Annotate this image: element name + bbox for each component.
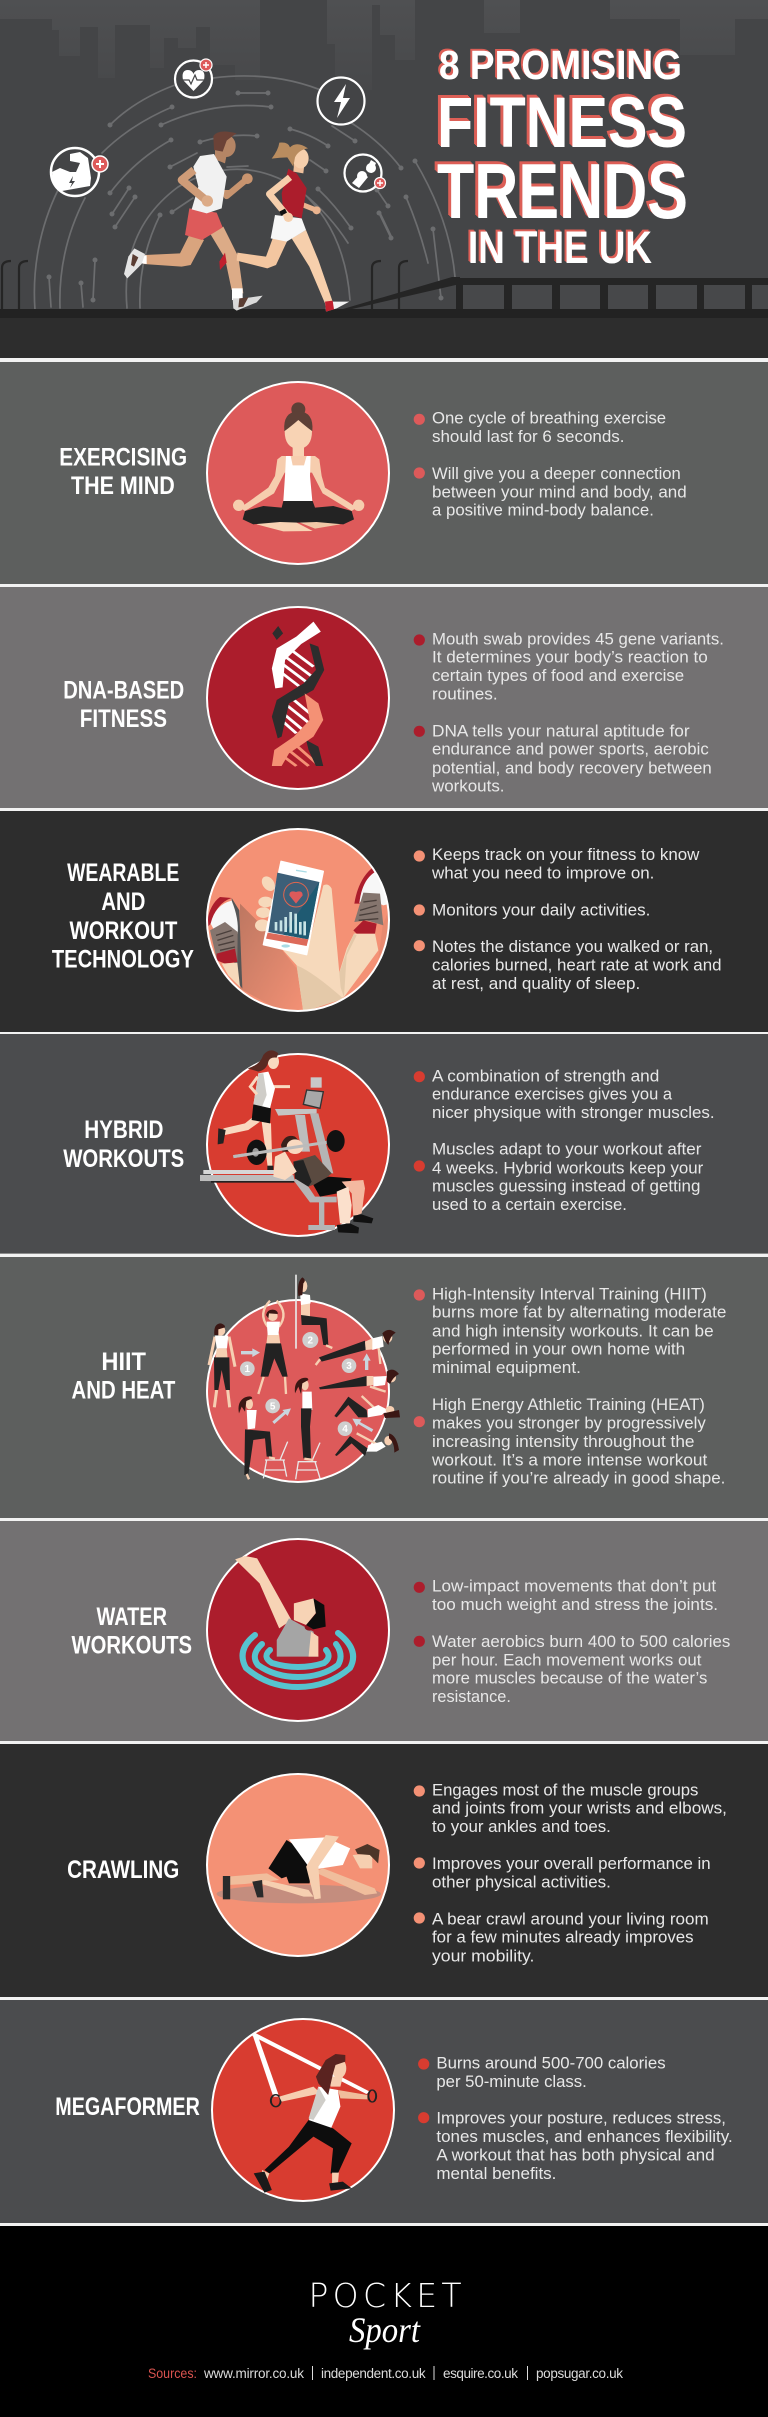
heading: HYBRID	[84, 1116, 164, 1144]
bullet list: too much weight and stress the joints.	[432, 1596, 718, 1614]
figure: arms raised	[258, 1301, 288, 1394]
icon: bone joint	[344, 154, 386, 192]
motion arcs	[34, 76, 455, 310]
runner: man	[124, 132, 263, 311]
step numbers: 2	[308, 1335, 314, 1346]
bullet list: A combination of strength and	[432, 1067, 659, 1085]
figure: sit-up top	[334, 1396, 400, 1418]
bullet list: endurance and power sports, aerobic	[432, 741, 709, 759]
bullet list: Muscles adapt to your workout after	[432, 1141, 702, 1159]
arrows	[241, 1348, 373, 1432]
step numbers: 4	[342, 1424, 348, 1435]
heading	[59, 444, 187, 500]
icon: lightning bolt	[318, 78, 364, 124]
bullet list: other physical activities.	[432, 1873, 611, 1891]
title: 8 PROMISING	[439, 42, 682, 88]
bullet list	[414, 1781, 727, 1965]
icon: flexed bicep	[51, 148, 108, 196]
ground	[0, 309, 768, 358]
bullet list: routines.	[432, 686, 498, 704]
bullet list: for a few minutes already improves	[432, 1929, 694, 1947]
header panel	[0, 0, 768, 358]
bullet list: tones muscles, and enhances flexibility.	[436, 2128, 733, 2146]
bullet list: workouts.	[431, 778, 504, 796]
chairs	[263, 1442, 320, 1479]
sources: esquire.co.uk	[443, 2366, 518, 2381]
bullet list: Engages most of the muscle groups	[432, 1781, 698, 1799]
bullet list: per hour. Each movement works out	[432, 1651, 702, 1669]
panel: hiit and heat	[0, 1257, 768, 1518]
logo: pocket sport: POCKET	[308, 2276, 462, 2315]
illustration: meditation	[207, 382, 389, 564]
bullet list	[414, 630, 724, 796]
illustration: suspension straps	[212, 2019, 394, 2201]
step numbers: 3	[346, 1361, 352, 1372]
figure: standing	[209, 1323, 235, 1407]
bullet list: A workout that has both physical and	[436, 2147, 715, 2165]
heading: AND HEAT	[72, 1377, 176, 1405]
bullet list: Notes the distance you walked or ran,	[432, 938, 713, 956]
heading: THE MIND	[71, 472, 175, 500]
bullet list: Mouth swab provides 45 gene variants.	[432, 630, 724, 648]
bullet list: endurance exercises gives you a	[432, 1086, 672, 1104]
bullet list: High Energy Athletic Training (HEAT)	[432, 1396, 705, 1414]
sources	[148, 2366, 623, 2381]
bullet list: Improves your posture, reduces stress,	[436, 2110, 726, 2128]
bullet list: muscles guessing instead of getting	[432, 1178, 700, 1196]
bullet list: burns more fat by alternating moderate	[432, 1304, 726, 1322]
icon badge: plus	[92, 156, 108, 172]
bullet list	[414, 846, 722, 993]
panel: crawling	[0, 1744, 768, 1997]
title	[437, 42, 688, 273]
city skyline	[0, 0, 768, 320]
bullet list	[414, 1067, 715, 1214]
heading: HIIT	[101, 1348, 147, 1376]
sources: Sources:	[148, 2366, 197, 2381]
heading: DNA-BASED	[63, 677, 184, 705]
bullet list: Improves your overall performance in	[432, 1855, 711, 1873]
icon badge: plus	[200, 59, 212, 71]
bridge	[343, 277, 768, 309]
heading	[63, 1116, 184, 1173]
sources: independent.co.uk	[321, 2366, 426, 2381]
panel: hybrid workouts	[0, 1034, 768, 1253]
illustration: dna helix	[207, 607, 389, 789]
street lamps	[2, 261, 408, 309]
step numbers: 1	[245, 1364, 251, 1375]
bullet list: your mobility.	[432, 1947, 534, 1965]
bullet list: makes you stronger by progressively	[432, 1414, 707, 1432]
bullet list	[414, 1578, 730, 1706]
logo: pocket sport: Sport	[349, 2310, 421, 2350]
panel: exercising the mind	[0, 362, 768, 584]
figure: step-up	[238, 1396, 275, 1479]
icon: heart rate	[175, 59, 212, 98]
bullet list: used to a certain exercise.	[432, 1196, 627, 1214]
heading	[72, 1603, 192, 1660]
panel: dna-based fitness	[0, 587, 768, 808]
bullet list: performed in your own home with	[432, 1341, 685, 1359]
heading: TECHNOLOGY	[52, 946, 194, 974]
title: TRENDS	[437, 147, 688, 235]
bullet list: and joints from your wrists and elbows,	[432, 1800, 727, 1818]
bullet list	[418, 2054, 733, 2183]
bullet list: and high intensity workouts. It can be	[432, 1322, 714, 1340]
sources: www.mirror.co.uk	[203, 2366, 304, 2381]
title: FITNESS	[437, 84, 687, 163]
runner: woman	[219, 143, 349, 312]
heading: WEARABLE	[67, 859, 179, 887]
illustration: water aerobics	[207, 1539, 389, 1721]
illustration: treadmill and bench press	[200, 1050, 389, 1236]
bullet list: should last for 6 seconds.	[432, 428, 624, 446]
bullet list: what you need to improve on.	[431, 864, 654, 882]
heading: CRAWLING	[67, 1856, 179, 1884]
bullet list: a positive mind-body balance.	[432, 502, 654, 520]
heading: EXERCISING	[59, 444, 187, 472]
logo: pocket sport	[308, 2276, 462, 2350]
bullet list: One cycle of breathing exercise	[432, 410, 666, 428]
title: IN THE UK	[468, 222, 652, 273]
bullet list: potential, and body recovery between	[432, 759, 712, 777]
figure: plank low	[319, 1370, 399, 1392]
figure: step-up standing	[295, 1378, 313, 1460]
heading: FITNESS	[80, 705, 167, 733]
heading	[72, 1348, 176, 1405]
bullet list: minimal equipment.	[432, 1359, 581, 1377]
panel: water workouts	[0, 1521, 768, 1741]
bullet list: workout. It’s a more intense workout	[431, 1451, 708, 1469]
bullet list: DNA tells your natural aptitude for	[432, 722, 690, 740]
panel: megaformer	[0, 2000, 768, 2223]
figure: plank high	[316, 1330, 396, 1365]
bullet list	[414, 410, 687, 520]
bullet list: Keeps track on your fitness to know	[432, 846, 700, 864]
bullet list: Burns around 500-700 calories	[436, 2054, 666, 2072]
sources: popsugar.co.uk	[536, 2366, 623, 2381]
bullet list: between your mind and body, and	[432, 483, 687, 501]
bullet list: to your ankles and toes.	[432, 1818, 611, 1836]
bullet list: nicer physique with stronger muscles.	[432, 1104, 715, 1122]
bullet list: per 50-minute class.	[436, 2073, 587, 2091]
illustration: phone and running shoes	[206, 829, 392, 1012]
bullet list: resistance.	[432, 1688, 511, 1706]
bullet list: Monitors your daily activities.	[432, 901, 650, 919]
bullet list: Water aerobics burn 400 to 500 calories	[432, 1633, 730, 1651]
bullet list: A bear crawl around your living room	[432, 1910, 709, 1928]
bullet list: 4 weeks. Hybrid workouts keep your	[432, 1159, 704, 1177]
icon badge: plus	[374, 178, 386, 188]
heading: WORKOUTS	[63, 1145, 184, 1173]
figure: sit-up bottom	[335, 1433, 399, 1456]
footer	[0, 2226, 768, 2417]
heading	[63, 677, 184, 733]
illustration: bear crawl	[207, 1774, 389, 1956]
bullet list: mental benefits.	[436, 2165, 556, 2183]
bullet list: Low-impact movements that don’t put	[432, 1578, 717, 1596]
bullet list: routine if you’re already in good shape.	[432, 1470, 725, 1488]
bullet list: certain types of food and exercise	[432, 667, 684, 685]
panel: wearable and workout technology	[0, 811, 768, 1032]
step numbers	[240, 1332, 356, 1436]
bullet list: increasing intensity throughout the	[432, 1433, 694, 1451]
bullet list: more muscles because of the water’s	[432, 1670, 707, 1688]
illustration: exercise sequence	[207, 1275, 400, 1482]
figure: wall sit	[296, 1275, 332, 1349]
bullet list: Will give you a deeper connection	[432, 465, 681, 483]
bullet list: High-Intensity Interval Training (HIIT)	[432, 1285, 707, 1303]
heading: WATER	[96, 1603, 167, 1631]
bullet list: It determines your body’s reaction to	[432, 649, 708, 667]
heading: AND	[101, 888, 145, 916]
step numbers: 5	[270, 1401, 276, 1412]
bullet list	[414, 1285, 726, 1488]
heading: MEGAFORMER	[55, 2093, 200, 2121]
heading: WORKOUTS	[72, 1632, 192, 1660]
bullet list: calories burned, heart rate at work and	[432, 956, 722, 974]
bullet list: at rest, and quality of sleep.	[432, 975, 640, 993]
heading: WORKOUT	[70, 917, 178, 945]
heading	[52, 859, 194, 974]
